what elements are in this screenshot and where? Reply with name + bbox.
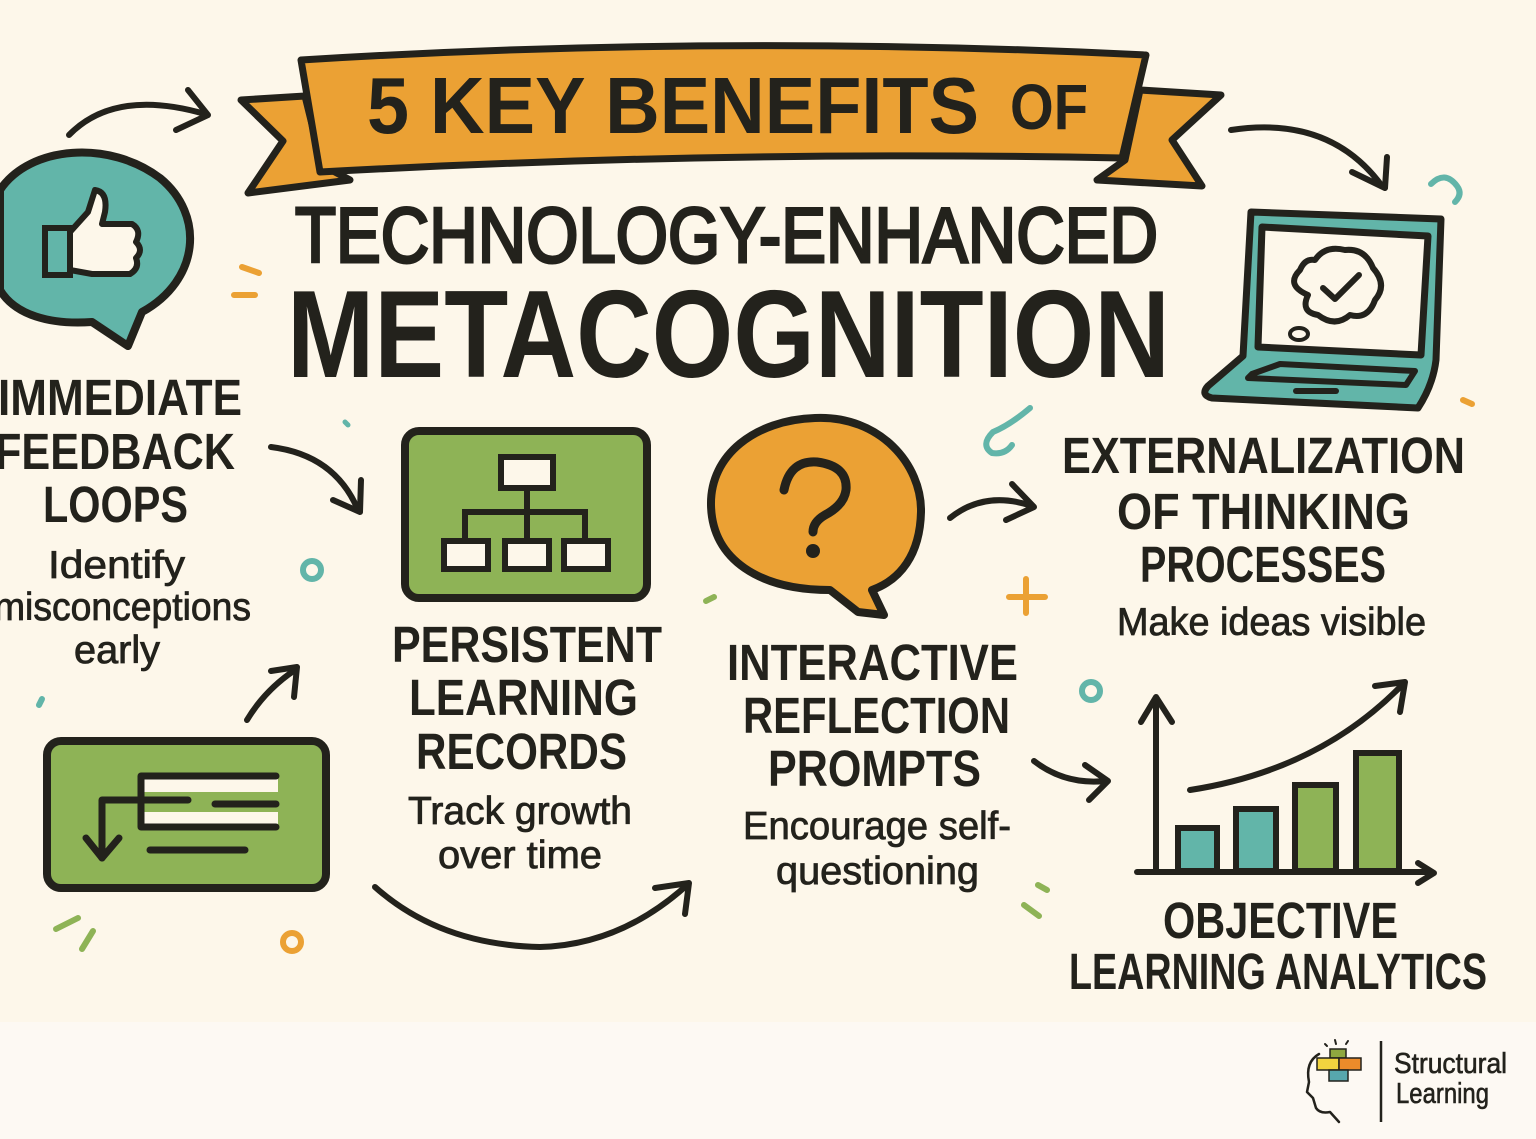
panel: externalization of thinking processes: Make ideas visible — [1117, 601, 1426, 644]
panel: interactive reflection prompts: PROMPTS — [768, 740, 981, 797]
panel: externalization of thinking processes — [1062, 427, 1465, 644]
title line: technology-enhanced: TECHNOLOGY-ENHANCED — [295, 191, 1158, 279]
arrow: records to prompts — [375, 883, 689, 947]
panel: objective learning analytics: OBJECTIVE — [1163, 892, 1398, 949]
panel: persistent learning records — [392, 616, 662, 877]
icon: question speech bubble — [711, 418, 921, 615]
panel: immediate feedback loops: IMMEDIATE — [0, 369, 242, 426]
logo: Structural Learning: Structural — [1394, 1048, 1507, 1080]
panel: immediate feedback loops: FEEDBACK — [0, 423, 235, 480]
logo: Structural Learning: Learning — [1396, 1078, 1489, 1110]
panel: persistent learning records: Track growth — [408, 790, 632, 833]
panel: immediate feedback loops: LOOPS — [43, 476, 188, 533]
panel: externalization of thinking processes: OF THINKING — [1117, 483, 1410, 540]
panel: interactive reflection prompts: REFLECTION — [743, 687, 1010, 744]
arrow: banner right — [1231, 127, 1387, 188]
arrow: banner left — [69, 90, 208, 135]
panel: interactive reflection prompts: INTERACTIVE — [727, 634, 1018, 691]
icon: laptop with thought cloud — [1205, 212, 1441, 408]
title banner — [241, 46, 1221, 193]
title line: metacognition: METACOGNITION — [287, 266, 1170, 404]
panel: immediate feedback loops: early — [74, 629, 160, 672]
title banner: OF — [1010, 71, 1088, 143]
arrow: feedback to records — [271, 447, 361, 512]
panel: interactive reflection prompts: questioning — [776, 850, 979, 893]
icon: thumbs up speech bubble — [0, 153, 190, 346]
arrow: prompts to analytics — [1034, 761, 1108, 800]
logo: Structural Learning — [1307, 1040, 1507, 1122]
panel: objective learning analytics — [1069, 892, 1487, 1000]
arrow: card up to records — [247, 667, 297, 720]
panel: immediate feedback loops: Identify — [48, 544, 186, 587]
icon: green hierarchy card — [405, 431, 647, 598]
panel: interactive reflection prompts — [727, 634, 1018, 893]
panel: externalization of thinking processes: EXTERNALIZATION — [1062, 427, 1465, 484]
panel: immediate feedback loops: misconceptions — [0, 586, 251, 629]
panel: interactive reflection prompts: Encourage self- — [743, 805, 1011, 848]
title banner: 5 KEY BENEFITS — [367, 61, 979, 150]
panel: persistent learning records: RECORDS — [416, 723, 627, 780]
decorative confetti accents — [39, 177, 1472, 951]
panel: immediate feedback loops — [0, 369, 251, 672]
panel: externalization of thinking processes: PROCESSES — [1140, 536, 1386, 593]
icon: green feedback card — [47, 741, 326, 888]
arrow: question to externalization — [950, 484, 1034, 520]
bar chart with rising arrow — [1137, 682, 1434, 883]
panel: persistent learning records: over time — [438, 834, 602, 877]
panel: persistent learning records: PERSISTENT — [392, 616, 662, 673]
panel: persistent learning records: LEARNING — [409, 669, 638, 726]
